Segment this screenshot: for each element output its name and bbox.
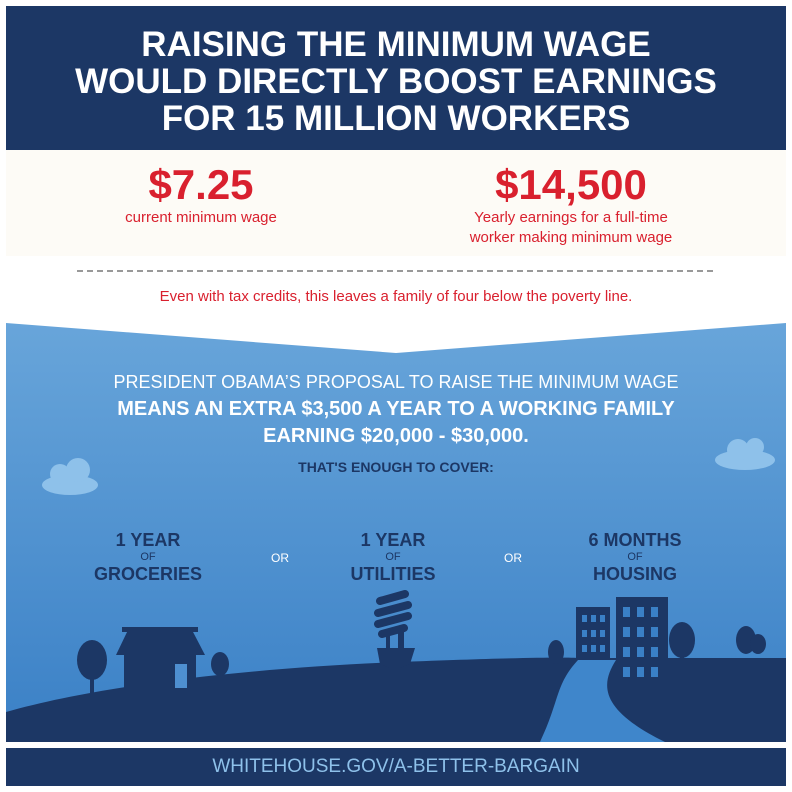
clouds [42, 438, 775, 495]
stats band [6, 150, 786, 256]
proposal text: MEANS AN EXTRA $3,500 A YEAR TO A WORKING FAMILY [117, 398, 675, 420]
footer: WHITEHOUSE.GOV/A-BETTER-BARGAIN [212, 756, 580, 777]
proposal text: PRESIDENT OBAMA’S PROPOSAL TO RAISE THE MINIMUM WAGE [113, 372, 679, 392]
or 1: OR [271, 551, 289, 565]
road [540, 660, 665, 742]
item: housing: OF [627, 551, 643, 563]
proposal text: EARNING $20,000 - $30,000. [263, 425, 529, 447]
item: groceries: OF [140, 551, 156, 563]
header: WOULD DIRECTLY BOOST EARNINGS [75, 62, 717, 101]
header: FOR 15 MILLION WORKERS [162, 99, 630, 138]
buildings [576, 607, 610, 667]
or 2: OR [504, 551, 522, 565]
stat: 14500: worker making minimum wage [470, 229, 672, 246]
poverty note: Even with tax credits, this leaves a family of four below the poverty line. [160, 288, 632, 305]
hill [6, 594, 786, 742]
proposal text [113, 372, 679, 447]
footer [6, 748, 786, 786]
item: housing: 6 MONTHS HOUSING [588, 530, 682, 584]
stat: 14500: Yearly earnings for a full-time [474, 209, 668, 226]
stat: 7.25: current minimum wage [125, 209, 277, 226]
trees [77, 640, 107, 680]
stat: 7.25: $7.25 [148, 161, 254, 208]
header: RAISING THE MINIMUM WAGE [141, 25, 651, 64]
stat: 7.25 [125, 161, 277, 226]
bulb [377, 648, 415, 668]
header [6, 6, 786, 150]
item: utilities: OF [385, 551, 401, 563]
store [124, 652, 196, 690]
subheading: THAT'S ENOUGH TO COVER: [298, 459, 494, 475]
stat: 14500: $14,500 [495, 161, 647, 208]
stat: 14500 [470, 161, 672, 246]
item: utilities: 1 YEAR UTILITIES [350, 530, 436, 584]
item: groceries: 1 YEAR GROCERIES [94, 530, 202, 584]
